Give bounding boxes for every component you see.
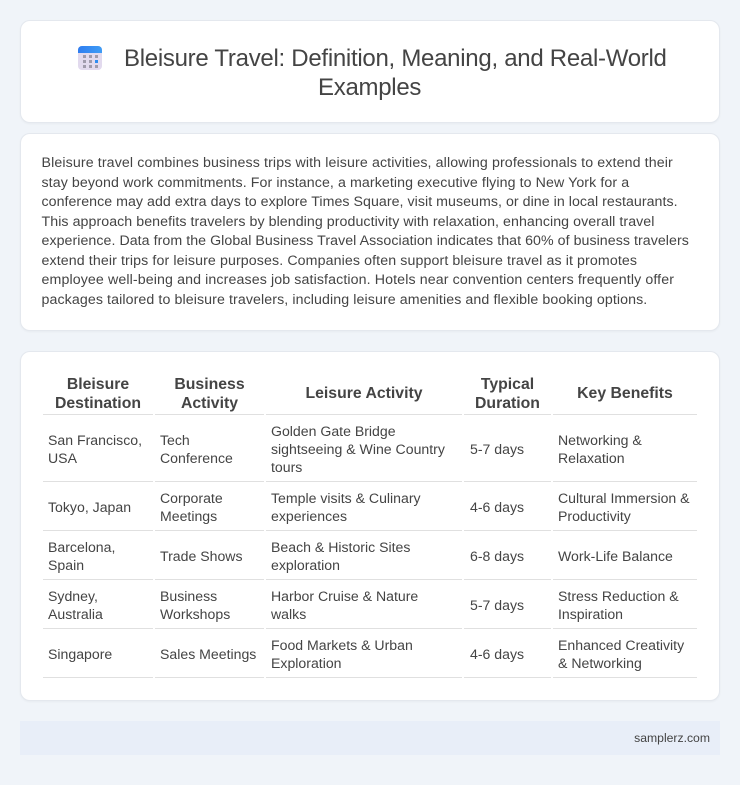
panel: description card	[20, 133, 720, 331]
table row: Tokyo: Tokyo, Japan	[48, 499, 131, 515]
table header row: Typical	[481, 376, 534, 393]
table row: Barcelona: Trade Shows	[160, 548, 243, 564]
table row: San Francisco: USA	[48, 450, 77, 466]
text block: description: stay beyond work commitments. For instance, a marketing executive flying to New York for a	[42, 174, 629, 190]
table row: San Francisco: tours	[271, 459, 302, 475]
table row: Barcelona: exploration	[271, 557, 340, 573]
table header row: Activity	[181, 395, 238, 412]
table row: San Francisco: Golden Gate Bridge	[271, 423, 396, 439]
table row: Barcelona: Barcelona,	[48, 539, 115, 555]
table row: Sydney	[43, 588, 697, 629]
table row: San Francisco: sightseeing & Wine Country	[271, 441, 445, 457]
table header row: Bleisure	[67, 376, 129, 393]
table row: San Francisco: Networking &	[558, 432, 642, 448]
table header row: Leisure Activity	[305, 385, 423, 402]
text block: description: This approach benefits travelers by blending productivity with relaxation, enhancing overall travel	[42, 214, 654, 230]
text block: description: Bleisure travel combines business trips with leisure activities, allowing professionals to extend their	[42, 155, 673, 171]
icon: calendar	[78, 46, 102, 70]
table row: Barcelona	[43, 539, 697, 580]
text block: description: extend their trips for leisure purposes. Companies often support bleisure travel as it promotes	[42, 252, 637, 268]
table row: Barcelona: Spain	[48, 557, 84, 573]
panel: table card	[20, 351, 720, 701]
table row: Sydney: Workshops	[160, 606, 230, 622]
panel: title card	[20, 20, 720, 123]
table row: Barcelona: Beach & Historic Sites	[271, 539, 410, 555]
table header row	[43, 376, 697, 415]
table row: Singapore: Enhanced Creativity	[558, 637, 684, 653]
table row: Sydney: Stress Reduction &	[558, 588, 679, 604]
table header row: Duration	[475, 395, 540, 412]
table row: Tokyo: 4-6 days	[470, 499, 524, 515]
text block: description: employee well-being and increases job satisfaction. Hotels near convention centers frequently offer	[42, 272, 674, 288]
table row: San Francisco: San Francisco,	[48, 432, 142, 448]
table row: San Francisco	[43, 423, 697, 482]
table row: Singapore: 4-6 days	[470, 646, 524, 662]
table row: Sydney: walks	[271, 606, 306, 622]
table row: San Francisco: 5-7 days	[470, 441, 524, 457]
table row: Singapore: Singapore	[48, 646, 112, 662]
text block: description: conference may add extra days to explore Times Square, visit museums, or dine in local restaurants.	[42, 194, 678, 210]
table row: Tokyo: experiences	[271, 508, 347, 524]
table row: Sydney: Sydney,	[48, 588, 98, 604]
table header row: Key Benefits	[577, 385, 673, 402]
table row: Singapore: Food Markets & Urban	[271, 637, 413, 653]
table row: Barcelona: 6-8 days	[470, 548, 524, 564]
table row: Sydney: Australia	[48, 606, 103, 622]
table row: San Francisco: Relaxation	[558, 450, 625, 466]
title: Bleisure Travel: Definition, Meaning, and Real-World	[124, 45, 667, 72]
table row: Singapore: & Networking	[558, 655, 642, 671]
table header row: Destination	[55, 395, 141, 412]
table row: Singapore	[43, 637, 697, 678]
table row: Sydney: Business	[160, 588, 217, 604]
title	[124, 45, 667, 101]
table row: Tokyo: Meetings	[160, 508, 217, 524]
table row: Sydney: 5-7 days	[470, 597, 524, 613]
table row: Tokyo: Productivity	[558, 508, 631, 524]
table row: Tokyo	[43, 490, 697, 531]
table row: San Francisco: Conference	[160, 450, 233, 466]
footer text: samplerz.com	[634, 731, 710, 745]
table row: Tokyo: Cultural Immersion &	[558, 490, 690, 506]
table row: Singapore: Exploration	[271, 655, 342, 671]
table header row: Business	[174, 376, 245, 393]
footer bar	[20, 721, 720, 755]
text block: description	[42, 155, 689, 308]
table row: Tokyo: Corporate	[160, 490, 223, 506]
title: Examples	[318, 74, 421, 101]
table row: Sydney: Harbor Cruise & Nature	[271, 588, 418, 604]
table row: Sydney: Inspiration	[558, 606, 623, 622]
table row: San Francisco: Tech	[160, 432, 190, 448]
text block: description: packages tailored to bleisure travelers, including leisure amenities and flexible booking options.	[42, 292, 647, 308]
text block: description: experience. Data from the Global Business Travel Association indicates that 60% of business travelers	[42, 233, 689, 249]
table row: Tokyo: Temple visits & Culinary	[271, 490, 421, 506]
table row: Barcelona: Work-Life Balance	[558, 548, 673, 564]
table row: Singapore: Sales Meetings	[160, 646, 256, 662]
